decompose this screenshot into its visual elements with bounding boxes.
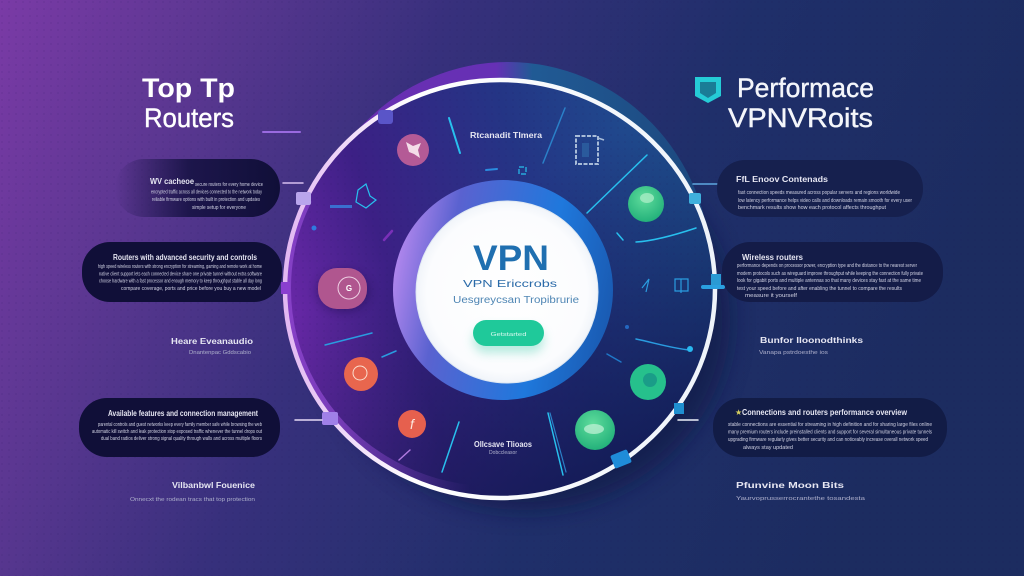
panel: right 3 — [713, 398, 947, 457]
panel: right 2 — [722, 242, 943, 302]
label: right middle: Bunfor Iloonodthinks — [760, 336, 864, 345]
title: left: Routers — [144, 103, 234, 133]
panel: left 1: reliable firmware options with built in protection and updates — [152, 197, 260, 203]
panel: left 3: parental controls and guest networks keep every family member safe while browsing the web — [98, 422, 262, 428]
panel: right 2: performance depends on processor power, encryption type and the distance to the nearest server — [737, 263, 917, 269]
icon: shield — [695, 77, 721, 103]
panel: right 1: benchmark results show how each protocol affects throughput — [738, 205, 887, 211]
panel: left 3: dual band radios deliver strong signal quality through walls and across multiple floors — [101, 436, 262, 442]
panel: left 2: Routers with advanced security and controls — [113, 253, 257, 262]
node: orange-red: f — [410, 416, 416, 432]
label: bottom of ring: Ollcsave Tlioaos — [474, 440, 533, 449]
panel: left 3: automatic kill switch and leak protection stop exposed traffic whenever the tunnel drops out — [92, 429, 263, 435]
panel: right 2: test your speed before and after enabling the tunnel to compare the results — [737, 286, 902, 292]
label: left bottom — [130, 481, 256, 503]
panel: right 1: fast connection speeds measured across popular servers and regions worldwide — [738, 190, 900, 196]
node: pink star — [397, 134, 429, 166]
tagline: Uesgreycsan Tropibrurie — [453, 295, 580, 306]
node: mauve left — [317, 268, 369, 312]
panel: right 3: always stay updated — [743, 445, 793, 451]
title: right — [728, 73, 874, 133]
node: green bottom — [575, 410, 615, 450]
central ring diagram — [263, 62, 730, 510]
small line icons — [312, 167, 693, 352]
node: orange — [344, 357, 378, 391]
panel: left 1: encrypted traffic across all devices connected to the network today — [151, 190, 262, 196]
chart icon — [576, 136, 604, 164]
label: top of ring: Rtcanadit Tlmera — [470, 131, 543, 140]
button — [473, 320, 544, 353]
panel: right 3: upgrading firmware regularly gives better security and can noticeably increase overall network speed — [728, 437, 928, 443]
label: left bottom: Onnecxt the rodean tracs that top protection — [130, 497, 255, 503]
VPN heading: VPN — [473, 239, 549, 278]
panel: right 2: look for gigabit ports and multiple antennas so that many devices stay fast at the same time — [737, 278, 921, 284]
icon: star: ★ — [735, 408, 742, 417]
panel: left 2: choose hardware with a fast processor and enough memory to keep throughput stable all day long — [99, 278, 262, 284]
panel: right 1 — [717, 160, 923, 217]
node: orange-red — [398, 410, 426, 438]
panel: left 2: compare coverage, ports and price before you buy a new model — [121, 286, 261, 292]
panel: left 1 — [115, 159, 280, 217]
disc — [284, 80, 716, 498]
outer ring — [285, 80, 715, 498]
top halo — [305, 62, 711, 478]
label: right middle — [759, 336, 864, 356]
subtitle: VPN Ericcrobs — [463, 279, 557, 290]
panel: left 1: WV cacheoe — [150, 177, 195, 186]
panel: right 3: Connections and routers performance overview — [742, 408, 908, 417]
node: mauve left: G — [346, 284, 352, 293]
white center panel — [416, 201, 598, 383]
title: right: Performace — [737, 73, 874, 103]
label: right bottom — [736, 481, 866, 502]
title: left — [142, 73, 235, 133]
node: green right — [630, 364, 666, 400]
inner purple band — [287, 200, 470, 489]
label: left middle — [171, 337, 253, 356]
cyan rays — [325, 108, 696, 475]
label: right bottom: Pfunvine Moon Bits — [736, 481, 845, 490]
panel: right 2: modern protocols such as wireguard improve throughput while keeping the connection fully private — [737, 271, 923, 277]
label: bottom of ring — [474, 440, 533, 456]
panel: left 1: simple setup for everyone — [192, 205, 246, 211]
label: left bottom: Vilbanbwl Fouenice — [172, 481, 256, 490]
panel: left 3: Available features and connection management — [108, 409, 258, 418]
panel: right 2: measure it yourself — [745, 293, 798, 299]
label: left middle: Dnantenpac Gddscabio — [189, 350, 251, 356]
ring connectors — [281, 110, 721, 469]
panel: left 1: secure routers for every home device — [195, 182, 263, 188]
inner blue circle — [393, 180, 613, 400]
panel: right 3: many premium routers include preinstalled clients and support for several simultaneous private tunnels — [728, 430, 932, 436]
label: right middle: Vanapa pstrdoesthe ios — [759, 350, 828, 356]
button: Getstarted — [490, 332, 526, 338]
panel: right 3: stable connections are essential for streaming in high definition and for sharing large files online — [728, 422, 932, 428]
panel: left 3 — [79, 398, 280, 457]
label: bottom of ring: Dobccleasor — [489, 450, 517, 456]
label: left middle: Heare Eveanaudio — [171, 337, 253, 346]
panel: right 2: Wireless routers — [742, 253, 804, 262]
panel: left 2 — [82, 242, 282, 302]
panel: left 2: native client support lets each connected device share one private tunnel without extra software — [99, 272, 262, 278]
node: green top right — [628, 186, 664, 222]
label: right bottom: Yaurvoprusserrocrantethe tosandesta — [736, 496, 866, 502]
outer shadow — [320, 130, 730, 510]
panel: right 1: FfL Enoov Contenads — [736, 175, 829, 184]
panel: left 2: high speed wireless routers with strong encryption for streaming, gaming and remote work at home — [98, 264, 262, 270]
connector lines — [263, 132, 723, 420]
panel: right 1: low latency performance helps video calls and downloads remain smooth for every user — [738, 198, 912, 204]
title: right: VPNVRoits — [728, 103, 873, 133]
title: left: Top Tp — [142, 73, 235, 103]
